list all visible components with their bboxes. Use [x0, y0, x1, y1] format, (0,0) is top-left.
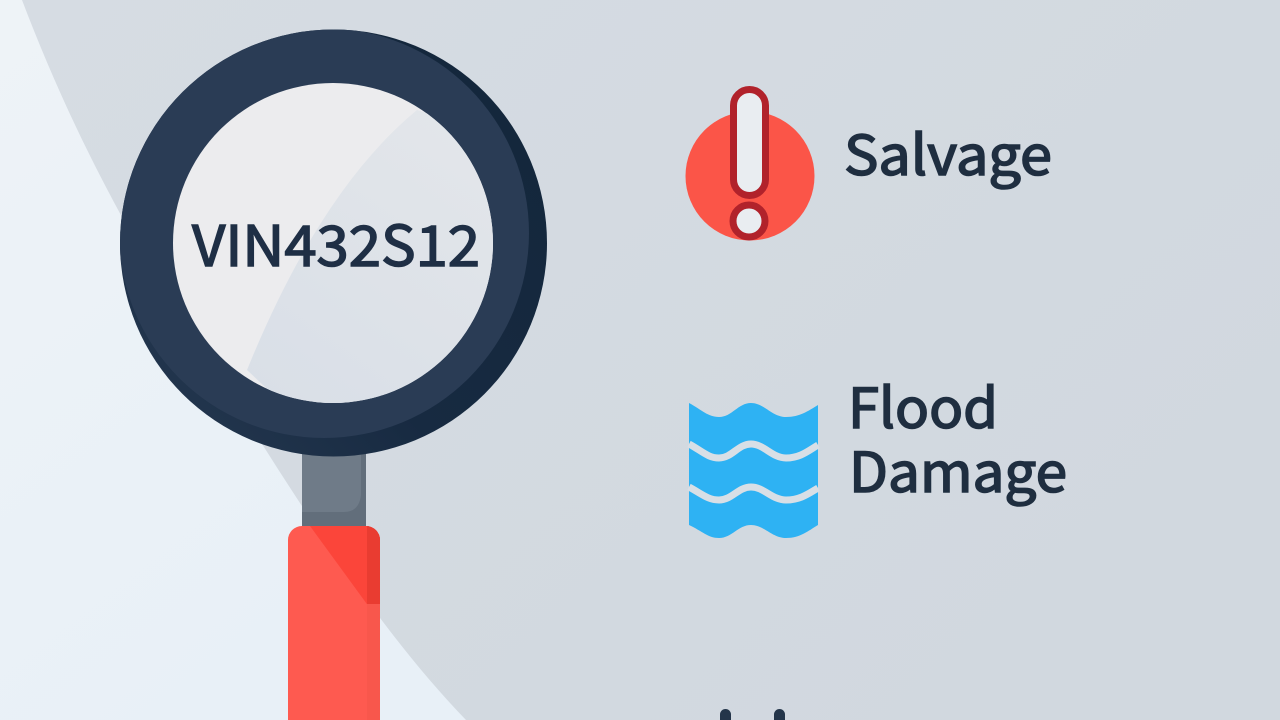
VIN number: VIN432S12 — [192, 202, 480, 283]
icon: magnifying glass — [119, 28, 547, 720]
magnifier lens — [173, 83, 510, 420]
label: Flood Damage: Flood — [848, 364, 998, 444]
magnifier neck — [302, 448, 366, 528]
magnifier ring — [119, 28, 547, 456]
magnifier handle grip — [288, 526, 380, 720]
icon: flood waves — [689, 403, 818, 538]
label: Salvage: Salvage — [844, 111, 1052, 191]
label: Flood Damage — [848, 364, 1067, 508]
icon: salvage warning — [686, 90, 814, 240]
label: Flood Damage: Damage — [849, 428, 1067, 508]
cropped next item letters — [720, 709, 785, 720]
